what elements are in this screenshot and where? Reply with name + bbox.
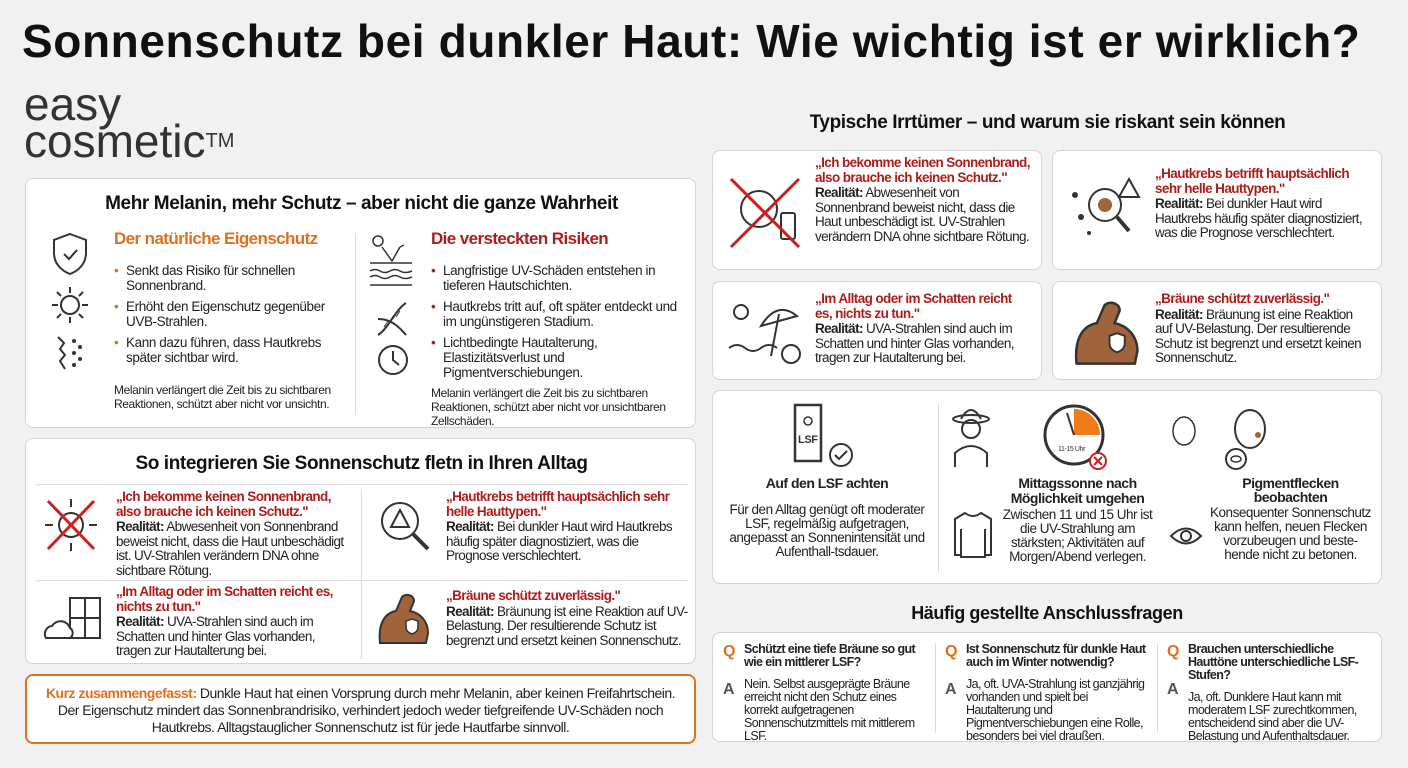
card: no sunburn: „Ich bekomme keinen Sonnenbrand, also brauche ich keinen Schutz." [815,155,1030,184]
tip: LSF: Auf den LSF achten [766,475,888,491]
card: no sunburn: Realität: Abwesenheit von Sonnenbrand beweist nicht, dass die Haut unbeschädigt ist. UV-Strahlen verändern DNA ohne sichtbare Rötung. [815,185,1029,244]
icon: cells magnifier [1072,177,1141,235]
logo [24,78,234,167]
faq 1: A [723,681,734,698]
cell: shade: Realität: UVA-Strahlen sind auch im Schatten und hinter Glas vorhanden, tragen zur Hautalterung bei. [116,614,315,658]
icon: magnifier warning [381,502,430,550]
heading: melanin: Mehr Melanin, mehr Schutz – aber nicht die ganze Wahrheit [105,193,618,214]
panel: daily integration [25,438,696,664]
cell: no sunburn: Realität: Abwesenheit von Sonnenbrand beweist nicht, dass die Haut unbeschädigt ist. UV-Strahlen verändern DNA ohne sichtbare Rötung. [116,519,344,578]
tip: LSF: Für den Alltag genügt oft moderater LSF, regelmäßig aufgetragen, angepasst an Sonnenintensität und Aufenthall-tsdauer. [729,502,925,559]
tip: midday: Zwischen 11 und 15 Uhr ist die UV-Strahlung am stärksten; Aktivitäten auf Morgen/Abend verlegen. [1003,507,1152,564]
icon: clock [378,345,408,375]
icon: uv layers [370,235,412,286]
panel: tips [712,390,1382,584]
panel: melanin [25,178,696,428]
faq 1: Nein. Selbst ausgeprägte Bräune erreicht nicht den Schutz eines korrekt aufgetragenen Sonnenschutzmittels mit mittlerem LSF. [744,677,915,743]
faq 3: Brauchen unterschiedliche Hauttöne unterschiedliche LSF-Stufen? [1188,642,1358,682]
icon: arm [1074,302,1139,365]
right column: hidden risks: Hautkrebs tritt auf, oft später entdeckt und im ungünstigeren Stadium. [443,299,677,329]
cell: shade: „Im Alltag oder im Schatten reicht es, nichts zu tun." [116,584,333,614]
cell: skin cancer [446,489,672,563]
heading: daily: So integrieren Sie Sonnenschutz fletn in Ihren Alltag [135,453,588,474]
panel: FAQ [712,632,1382,742]
card: skin cancer: Realität: Bei dunkler Haut wird Hautkrebs häufig später diagnostiziert, was die Prognose verschlechtert. [1155,196,1362,240]
logo: easy [24,78,121,130]
title: Sonnenschutz bei dunkler Haut: Wie wichtig ist er wirklich? [22,15,1360,67]
icon: clock midday: 11-15 Uhr [1058,446,1086,453]
faq 1: Schützt eine tiefe Bräune so gut wie ein mittlerer LSF? [744,642,915,669]
tip: pigment: Pigmentflecken beobachten [1242,475,1339,505]
faq 2: Ist Sonnenschutz für dunkle Haut auch im Winter notwendig? [966,642,1145,669]
summary callout: Kurz zusammengefasst: Dunkle Haut hat einen Vorsprung durch mehr Melanin, aber keinen Freifahrtschein. Der Eigenschutz mindert das Sonnenbrandrisiko, verhindert jedoch weder tiefgreifende UV-Schäden noch Hautkrebs. Alltagstauglicher Sonnenschutz ist für jede Hautfarbe sinnvoll. [46,685,675,735]
faq 3 [1167,642,1358,743]
faq 2: A [945,681,956,698]
icon: skin cells [57,336,82,370]
cell: skin cancer: „Hautkrebs betrifft hauptsächlich sehr helle Hauttypen." [446,489,669,518]
heading: FAQ: Häufig gestellte Anschlussfragen [911,603,1183,623]
left column: natural protection: Kann dazu führen, dass Hautkrebs später sichtbar wird. [126,335,321,365]
icon: sun [52,287,88,323]
faq 3: Q [1167,643,1179,660]
icon: face crossed [730,178,800,248]
card: tan [1052,281,1382,380]
icon: faces [1172,409,1266,470]
icon: long sleeve [954,512,992,558]
tip: pigment: Konsequenter Sonnenschutz kann helfen, neuen Flecken vorzubeugen und beste-hende nicht zu betonen. [1210,505,1371,562]
faq 1: Q [723,643,735,660]
faq 3: Ja, oft. Dunklere Haut kann mit moderatem LSF zurechtkommen, entscheidend sind aber die UV-Belastung und Aufenthaltsdauer. [1188,690,1357,743]
right column: hidden risks: Die versteckten Risiken [431,229,608,248]
icon: window cloud [44,597,101,639]
card: no sunburn [712,150,1042,270]
cell: tan: „Bräune schützt zuverlässig." [446,588,620,603]
faq 2 [945,642,1146,743]
faq 2: Q [945,643,957,660]
cell: skin cancer: Realität: Bei dunkler Haut wird Hautkrebs häufig später diagnostiziert, was die Prognose verschlechtert. [446,519,672,563]
cell: tan: Realität: Bräunung ist eine Reaktion auf UV-Belastung. Der resultierende Schutz ist begrenzt und ersetzt keinen Sonnenschutz. [446,604,688,648]
left column: natural protection: Melanin verlängert die Zeit bis zu sichtbaren Reaktionen, schützt aber nicht vor unsichtn. [114,383,331,411]
right column: hidden risks [431,229,677,428]
card: skin cancer [1052,150,1382,270]
card: shade: Realität: UVA-Strahlen sind auch im Schatten und hinter Glas vorhanden, tragen zur Hautalterung bei. [815,321,1014,365]
card: shade: „Im Alltag oder im Schatten reicht es, nichts zu tun." [815,291,1012,320]
icon: eye [1170,528,1202,544]
card: skin cancer: „Hautkrebs betrifft hauptsächlich sehr helle Hauttypen." [1155,166,1349,196]
right column: hidden risks: Melanin verlängert die Zeit bis zu sichtbaren Reaktionen, schützt aber nicht vor unsichtbaren Zellschäden. [431,386,666,428]
left column: natural protection: Der natürliche Eigenschutz [114,229,318,248]
icon: hat person [952,409,990,467]
icon: dna [378,302,407,336]
icon: sunscreen tube [794,404,853,467]
faq 1 [723,642,916,743]
icon: sunscreen tube: LSF [798,434,818,446]
tip: pigment [1210,475,1371,562]
summary callout [25,674,696,744]
tip: midday [1003,475,1153,564]
icon: shield [53,232,87,276]
icon: clock midday [1044,404,1107,470]
right column: hidden risks: Lichtbedingte Hautalterung, Elastizitätsverlust und Pigmentverschiebungen. [443,335,597,380]
cell: no sunburn [116,489,344,578]
cell: shade [116,584,333,658]
icon: sun crossed [45,499,97,551]
tip: LSF [729,475,925,559]
faq 3: A [1167,681,1178,698]
tip: midday: Mittagssonne nach Möglichkeit umgehen [1011,475,1144,506]
icon: arm [378,594,429,644]
logo: cosmeticTM [24,115,234,167]
heading: misconceptions: Typische Irrtümer – und warum sie riskant sein können [810,112,1285,133]
left column: natural protection: Erhöht den Eigenschutz gegenüber UVB-Strahlen. [126,299,325,329]
card: tan: Realität: Bräunung ist eine Reaktion auf UV-Belastung. Der resultierende Schutz ist begrenzt und ersetzt keinen Sonnenschutz. [1155,306,1361,365]
card: shade [712,281,1042,380]
icon: beach umbrella [728,304,801,364]
cell: no sunburn: „Ich bekomme keinen Sonnenbrand, also brauche ich keinen Schutz." [116,489,331,518]
faq 2: Ja, oft. UVA-Strahlung ist ganzjährig vorhanden und spielt bei Hautalterung und Pigmentverschiebungen eine Rolle, besonders bei viel draußen. [966,677,1144,743]
card: tan: „Bräune schützt zuverlässig." [1155,291,1329,306]
left column: natural protection [114,229,331,411]
right column: hidden risks: Langfristige UV-Schäden entstehen in tieferen Hautschichten. [443,263,655,293]
left column: natural protection: Senkt das Risiko für schnellen Sonnenbrand. [126,263,295,293]
